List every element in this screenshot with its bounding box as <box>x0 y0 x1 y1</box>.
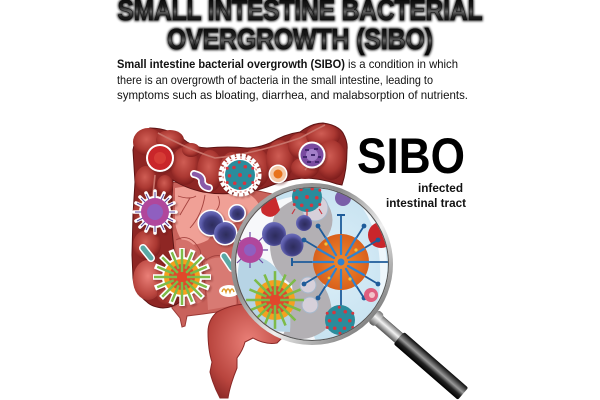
virus: purple spiky <box>134 191 176 233</box>
virus: green spiked <box>153 248 211 306</box>
lens: purple cell <box>335 192 351 206</box>
handle <box>368 310 468 400</box>
intro text block: Small intestine bacterial overgrowth (SIBO) <box>117 57 345 71</box>
lens: blue cells <box>262 215 312 256</box>
lens: red cell <box>261 195 280 217</box>
lens contents <box>236 188 388 340</box>
bacteria: blue cell cluster <box>198 204 246 246</box>
subheading: infected intestinal tract: infected <box>418 181 463 195</box>
lens: teal virus bottom <box>325 305 355 335</box>
lens: red cell right <box>368 223 386 248</box>
bacterium: red cell <box>146 144 174 172</box>
subheading: infected intestinal tract: intestinal tract <box>386 196 466 210</box>
intro text block: is a condition in which <box>348 57 458 71</box>
lens: purple virus <box>236 232 268 268</box>
bacterium: purple round cell <box>298 142 326 168</box>
subheading: infected intestinal tract <box>386 181 466 210</box>
lens: orange virus <box>291 214 391 310</box>
title <box>118 0 482 56</box>
title: OVERGROWTH (SIBO) <box>167 24 433 56</box>
large intestine colon <box>132 123 347 308</box>
title: OVERGROWTH (SIBO) <box>167 24 433 56</box>
magnifying glass <box>231 182 468 400</box>
SIBO heading: SIBO <box>357 128 465 184</box>
intro text block: there is an overgrowth of bacteria in the small intestine, leading to <box>117 73 433 87</box>
bacterium: purple worm <box>194 174 209 188</box>
virus: peach flower <box>268 164 288 184</box>
lens: green spiked virus <box>246 271 304 329</box>
lens ring <box>233 185 391 343</box>
intro text block: symptoms such as bloating, diarrhea, and malabsorption of nutrients. <box>117 88 468 102</box>
lens: pink cell <box>364 288 378 302</box>
small intestine <box>168 182 300 327</box>
lens: teal virus top <box>292 188 322 216</box>
intro text block <box>117 57 468 102</box>
small bacteria: teal rods and orange coil <box>143 248 239 297</box>
intestine illustration <box>132 123 347 398</box>
rectum <box>208 304 290 398</box>
virus: teal with white rim <box>220 156 260 194</box>
